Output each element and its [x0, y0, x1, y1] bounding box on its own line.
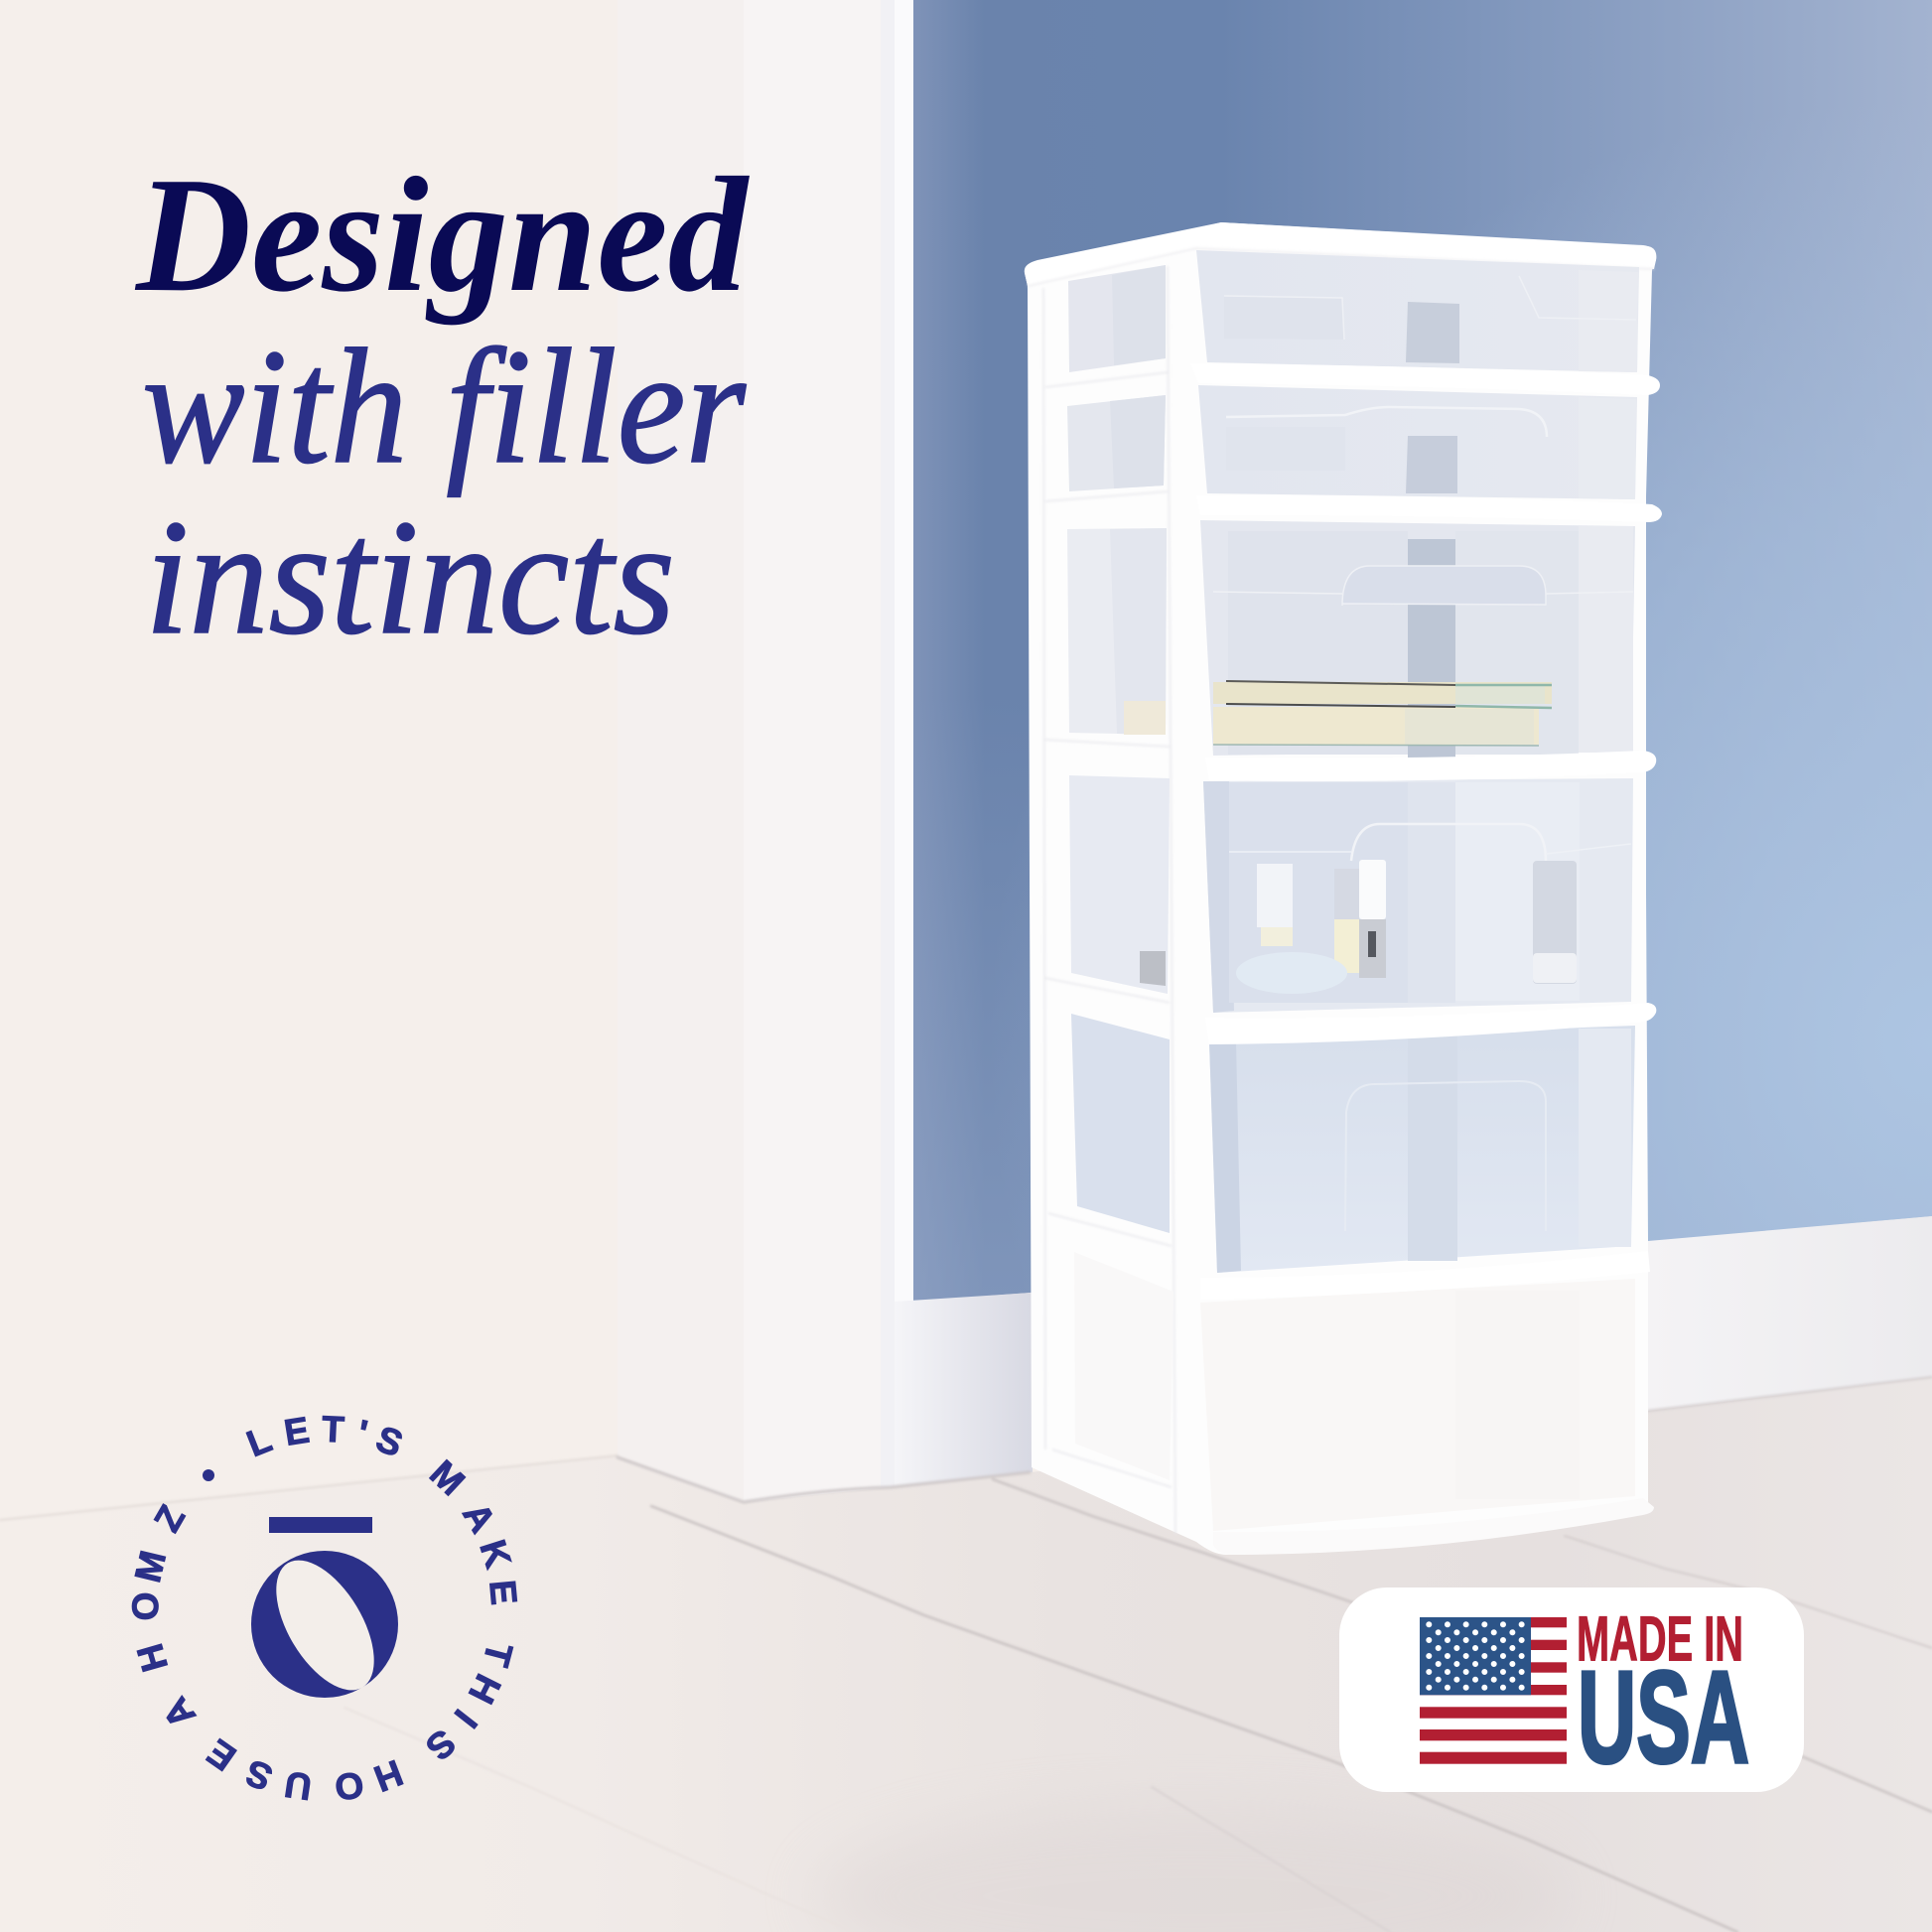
drawer 5 front	[1209, 1026, 1635, 1273]
headline	[134, 143, 751, 668]
american flag icon	[1420, 1617, 1567, 1764]
drawer 3 front	[1200, 520, 1635, 759]
headline line 1: Designed	[134, 143, 751, 326]
headline line 2: with filler	[142, 315, 747, 497]
background: wood floor	[0, 1377, 1932, 1932]
drawer 1 front	[1196, 250, 1639, 372]
drawer 3 handle	[1342, 566, 1546, 606]
front lips	[1190, 363, 1662, 1300]
brand seal	[125, 1409, 529, 1808]
made in USA badge	[1339, 1587, 1804, 1792]
drawer 6 front	[1200, 1279, 1635, 1531]
drawer 4 front	[1203, 778, 1633, 1013]
product: six drawer storage tower	[1025, 222, 1662, 1555]
background: blue wall	[913, 0, 1932, 1302]
badge text: made in: MADE IN	[1577, 1603, 1743, 1675]
bottles and soap on drawer 4	[1236, 860, 1577, 994]
seal ring text: LET'S MAKE THIS HOUSE A HOMZ	[125, 1409, 529, 1808]
books	[1213, 681, 1552, 746]
drawer 2 front	[1198, 385, 1637, 499]
background: wall column	[618, 0, 913, 1504]
logo letter o	[251, 1544, 398, 1707]
headline line 3: instincts	[145, 485, 675, 668]
badge background	[1339, 1587, 1804, 1792]
seal dot	[203, 1469, 214, 1481]
logo macron bar	[269, 1517, 372, 1533]
background: baseboards	[895, 1216, 1932, 1487]
side windows	[1067, 265, 1173, 1480]
frame shading	[1043, 266, 1175, 1534]
top cap	[1025, 222, 1656, 286]
base lip	[1213, 1498, 1654, 1555]
badge text: USA: USA	[1578, 1644, 1749, 1790]
tower frame silhouette	[1025, 222, 1656, 1555]
